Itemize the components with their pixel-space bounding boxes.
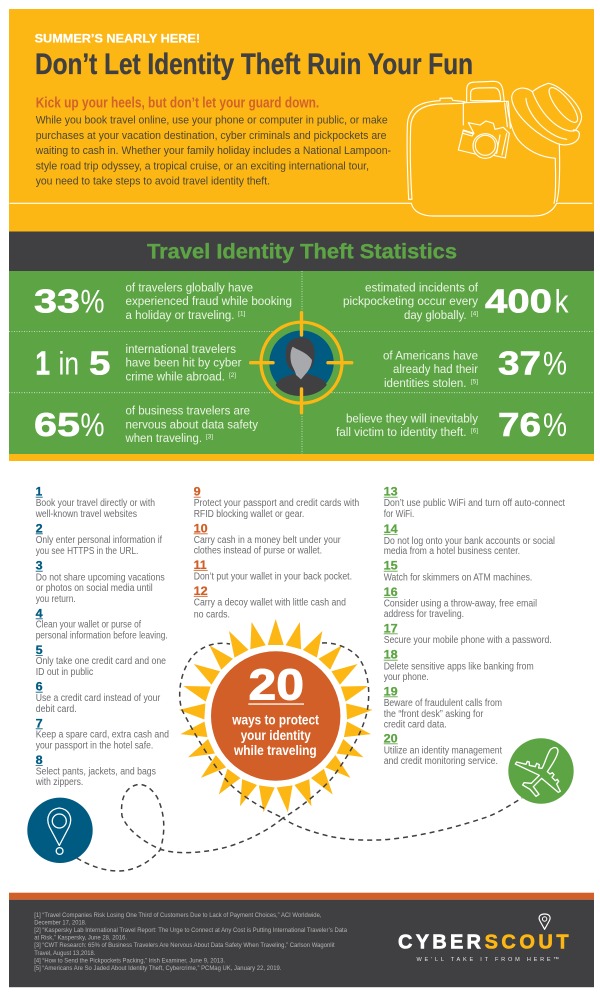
tips column 3: 15 — [384, 561, 398, 573]
tips column 2: RFID blocking wallet or gear. — [194, 509, 304, 520]
logo: Cyberscout: SCOUT — [485, 931, 569, 953]
stat: 76%: [6] — [471, 429, 478, 435]
references text: Travel, August 13,2018. — [34, 950, 95, 957]
stat: 65%: nervous about data safety — [126, 417, 259, 431]
tips column 1: 6 — [36, 682, 43, 694]
tips column 3: Watch for skimmers on ATM machines. — [384, 572, 532, 584]
stat: 33%: a holiday or traveling. — [126, 308, 234, 322]
stat: 33%: [1] — [238, 312, 246, 318]
subheading: Kick up your heels, but don’t let your guard down. — [36, 96, 319, 112]
stat: 400k — [343, 280, 569, 322]
eyebrow heading: SUMMER’S NEARLY HERE! — [35, 32, 200, 46]
tips column 2: no cards. — [194, 610, 230, 620]
tips column 3: 19 — [384, 686, 398, 698]
tips column 1: Select pants, jackets, and bags — [36, 766, 156, 778]
references text — [34, 912, 347, 972]
stat: 33%: of travelers globally have — [126, 280, 253, 294]
references text: [2] “Kaspersky Lab International Travel Report: The Urge to Connect at Any Cost is Putting International Traveler’s Data — [34, 927, 347, 934]
stat: 76%: fall victim to identity theft. — [336, 425, 466, 439]
intro text block: purchases at your vacation destination, cyber criminals and pickpockets are — [36, 130, 386, 142]
icon: airplane circle — [508, 738, 574, 804]
stat: 65%: [3] — [206, 434, 213, 440]
tips column 3: 20 — [384, 733, 398, 745]
intro text block: you need to take steps to avoid travel identity theft. — [36, 176, 270, 188]
tips column 1: Clean your wallet or purse of — [36, 620, 141, 630]
stat: 65%: of business travelers are — [126, 404, 250, 418]
tips column 3: Beware of fraudulent calls from — [384, 698, 502, 709]
tips column 3: Consider using a throw-away, free email — [384, 598, 537, 610]
stat: 37%: % — [543, 346, 567, 382]
stat: 37%: of Americans have — [383, 348, 478, 362]
stat: 65%: % — [80, 407, 104, 443]
icon: location pin circle — [27, 798, 93, 863]
tips column 1: 2 — [36, 523, 43, 535]
title: Don’t Let Identity Theft Ruin Your Fun — [35, 48, 473, 81]
stat: 33%: % — [80, 284, 104, 320]
tips column 1: your passport in the hotel safe. — [36, 740, 153, 752]
tips column 3: media from a hotel business center. — [384, 546, 520, 557]
stat: 1 in 5: international travelers — [126, 342, 236, 356]
tips column 1: or photos on social media until — [36, 583, 153, 594]
tips column 3: address for traveling. — [384, 609, 464, 620]
stat: 37%: 37 — [498, 344, 541, 382]
tips column 2: Carry cash in a money belt under your — [194, 535, 341, 546]
icon: suitcase with camera and hat — [10, 81, 592, 216]
stat: 76%: 76 — [498, 406, 541, 443]
tips column 1: personal information before leaving. — [36, 630, 168, 642]
stat: 400k: estimated incidents of — [365, 280, 479, 294]
stat: 33%: experienced fraud while booking — [126, 294, 292, 308]
tips column 3: the “front desk” asking for — [384, 709, 484, 720]
tips column 1: debit card. — [36, 704, 77, 715]
panel: footer — [9, 893, 594, 987]
tips column 1: with zippers. — [35, 777, 83, 788]
tips column 1: 4 — [36, 608, 43, 620]
tips column 1: 1 — [36, 487, 43, 499]
icon: sun badge — [178, 619, 373, 813]
badge caption: while traveling — [233, 743, 317, 758]
references text: [1] “Travel Companies Risk Losing One Third of Customers Due to Lack of Payment Choices,” ACI Worldwide, — [34, 912, 322, 919]
tips column 1: Book your travel directly or with — [36, 498, 155, 509]
stat: 1 in 5 — [35, 342, 242, 383]
badge number 20: 20 — [248, 660, 304, 709]
intro text block — [35, 114, 391, 188]
stat: 400k: day globally. — [404, 308, 466, 322]
tips column 2: 10 — [194, 523, 208, 535]
stat: 1 in 5: crime while abroad. — [126, 369, 225, 383]
stat: 1 in 5: in — [58, 346, 79, 382]
stat: 37%: already had their — [393, 362, 478, 376]
tips column 3: 18 — [384, 650, 398, 662]
tips column 2: 12 — [194, 586, 208, 598]
tips column 2: 11 — [194, 560, 207, 572]
tips column 3: 16 — [384, 587, 398, 599]
stat: 1 in 5: have been hit by cyber — [126, 356, 242, 370]
tips column 3: Delete sensitive apps like banking from — [384, 662, 534, 672]
stat: 37%: [5] — [471, 379, 478, 385]
statistics heading: Travel Identity Theft Statistics — [147, 240, 457, 264]
logo: Cyberscout — [398, 914, 569, 963]
stat: 65%: 65 — [34, 406, 80, 443]
tips column 1: you see HTTPS in the URL. — [36, 546, 138, 557]
stat: 400k: k — [555, 284, 569, 320]
tips column 3: credit card data. — [384, 720, 447, 730]
stat: 33%: 33 — [34, 282, 80, 320]
references text: at Risk,” Kaspersky, June 28, 2016. — [34, 934, 127, 942]
stat: 1 in 5: 1 — [35, 344, 50, 382]
tips column 2 — [194, 487, 359, 620]
logo: Cyberscout: CYBER — [398, 931, 482, 953]
tips column 3: for WiFi. — [384, 509, 414, 520]
intro text block: style road trip odyssey, a tropical cruise, or an exciting international tour, — [36, 160, 369, 172]
tips column 3: your phone. — [384, 672, 429, 683]
intro text block: While you book travel online, use your phone or computer in public, or make — [36, 114, 388, 126]
badge caption: your identity — [241, 728, 311, 743]
stat: 65%: when traveling. — [125, 431, 202, 445]
stat: 76% — [336, 406, 567, 443]
tips column 3 — [384, 487, 565, 767]
tips column 1: 8 — [36, 755, 43, 767]
tips column 3: Secure your mobile phone with a password. — [384, 635, 552, 646]
stat: 400k: pickpocketing occur every — [343, 294, 479, 308]
tips column 1: well-known travel websites — [35, 509, 137, 520]
badge caption — [231, 712, 319, 758]
tips column 2: clothes instead of purse or wallet. — [194, 546, 322, 556]
tips column 1 — [35, 487, 169, 788]
stat: 76%: % — [543, 407, 567, 443]
stat: 76%: believe they will inevitably — [346, 412, 479, 426]
panel: statistics — [9, 232, 594, 461]
tips column 1: Do not share upcoming vacations — [36, 572, 165, 584]
stat: 33% — [34, 280, 292, 322]
references text: December 17, 2018. — [34, 920, 87, 926]
stat: 400k: [4] — [471, 312, 478, 318]
tips column 3: Utilize an identity management — [384, 746, 502, 756]
tips column 1: Use a credit card instead of your — [36, 693, 161, 704]
tips column 3: 17 — [384, 623, 398, 635]
tips column 3: Do not log onto your bank accounts or social — [384, 536, 555, 547]
tips column 1: 3 — [36, 561, 43, 573]
stat: 37%: identities stolen. — [384, 376, 466, 390]
tips column 3: Don’t use public WiFi and turn off auto-connect — [384, 498, 565, 509]
tips column 1: 7 — [36, 718, 43, 730]
tips column 2: 9 — [194, 487, 201, 499]
tips column 3: 14 — [384, 524, 398, 536]
references text: [5] “Americans Are So Jaded About Identity Theft, Cybercrime,” PCMag UK, January 22, 2019. — [34, 965, 282, 972]
panel: header — [9, 9, 594, 232]
references text: [3] “CWT Research: 65% of Business Travelers Are Nervous About Data Safety When Traveling,” Carlson Wagonlit — [34, 942, 335, 949]
stat: 400k: 400 — [485, 282, 552, 320]
tips column 1: Only enter personal information if — [36, 535, 162, 546]
dashed travel route — [77, 643, 522, 871]
logo: Cyberscout: WE’LL TAKE IT FROM HERE™ — [416, 957, 559, 963]
references text: [4] “How to Send the Pickpockets Packing,” Irish Examiner, June 9, 2013. — [34, 958, 225, 964]
stat: 1 in 5: 5 — [89, 344, 110, 382]
tips column 2: Protect your passport and credit cards with — [194, 498, 359, 509]
stat: 1 in 5: [2] — [229, 373, 236, 379]
tips column 1: 5 — [36, 645, 43, 657]
tips column 2: Don’t put your wallet in your back pocket. — [194, 572, 352, 582]
tips column 2: Carry a decoy wallet with little cash and — [194, 598, 346, 608]
badge caption: ways to protect — [231, 712, 319, 728]
intro text block: waiting to cash in. Whether your family holiday includes a National Lampoon- — [35, 145, 391, 157]
tips column 1: Keep a spare card, extra cash and — [36, 730, 169, 740]
tips column 1: ID out in public — [36, 667, 93, 678]
tips column 3: 13 — [384, 487, 398, 499]
tips column 1: Only take one credit card and one — [36, 656, 166, 667]
stat: 37% — [383, 344, 567, 390]
tips column 1: you return. — [36, 594, 76, 605]
tips column 3: and credit monitoring service. — [384, 756, 498, 767]
stat: 65% — [34, 404, 259, 445]
icon: target on person — [251, 313, 352, 413]
